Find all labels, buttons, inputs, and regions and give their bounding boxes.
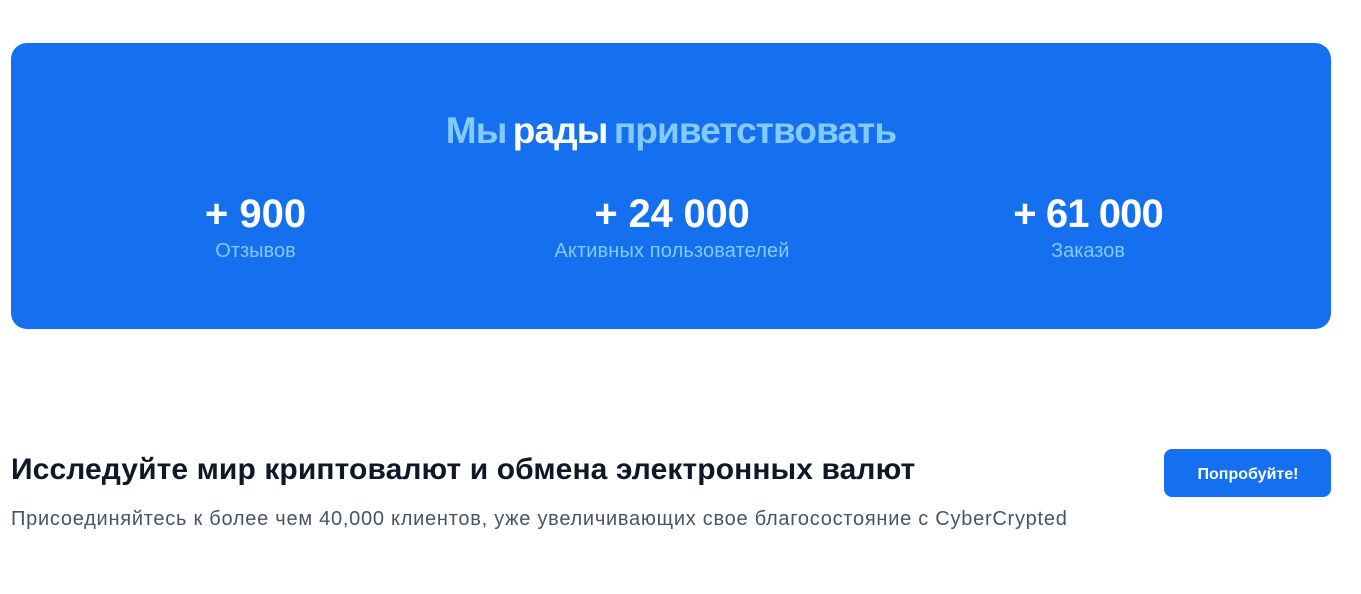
button: try it bbox=[1164, 449, 1331, 497]
stat: reviews bbox=[205, 192, 306, 262]
stat label: users: Активных пользователей bbox=[554, 240, 790, 262]
stat: orders bbox=[1013, 192, 1163, 262]
panel: statistics banner bbox=[11, 43, 1331, 329]
stat value: users: + 24 000 bbox=[594, 192, 750, 236]
call to action heading: Исследуйте мир криптовалют и обмена электронных валют bbox=[11, 453, 915, 486]
button: try it: Попробуйте! bbox=[1198, 466, 1298, 483]
stat: active users bbox=[554, 192, 790, 262]
heading: welcome: Мы рады приветствовать bbox=[446, 110, 896, 151]
stat label: reviews: Отзывов bbox=[215, 240, 296, 262]
stat value: orders: + 61 000 bbox=[1013, 192, 1163, 236]
stat label: orders: Заказов bbox=[1051, 240, 1125, 262]
stat value: reviews: + 900 bbox=[205, 192, 306, 236]
call to action subtext: Присоединяйтесь к более чем 40,000 клиентов, уже увеличивающих свое благосостояние с CyberCrypted bbox=[11, 508, 1068, 530]
